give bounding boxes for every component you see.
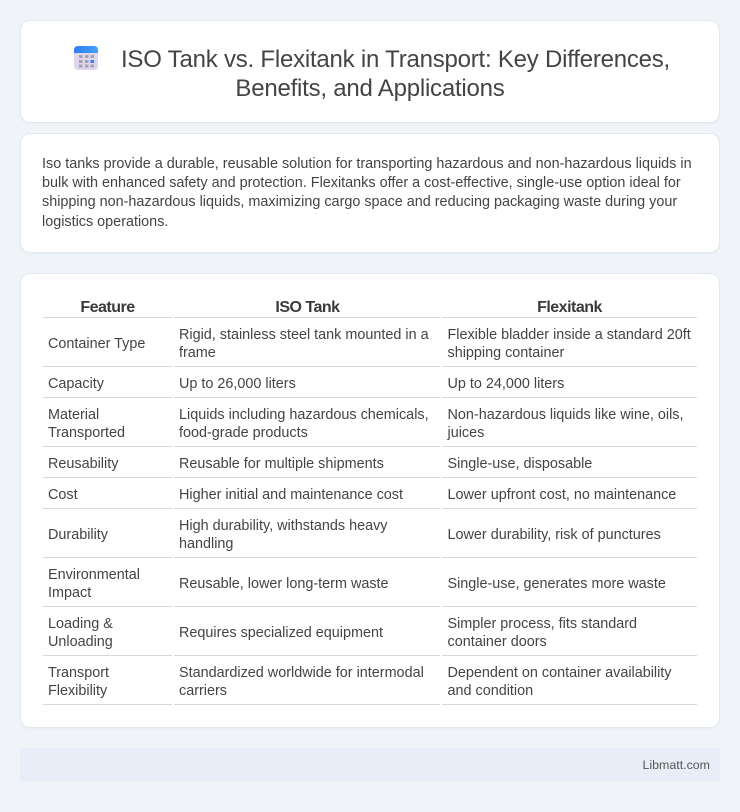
- comparison table: and condition: [448, 683, 533, 699]
- comparison table: Lower upfront cost, no maintenance: [448, 487, 676, 503]
- comparison table: shipping container: [448, 345, 564, 361]
- icon: calendar: [74, 46, 98, 70]
- row: Durability: Durability: [48, 527, 108, 543]
- row: Transport Flexibility: Flexibility: [48, 683, 107, 699]
- row: Reusability: Reusability: [48, 456, 118, 472]
- title: ISO Tank vs. Flexitank in Transport: Key Differences,: [121, 46, 670, 73]
- row: Material Transported: Transported: [48, 425, 125, 441]
- comparison table: frame: [179, 345, 216, 361]
- row: Material Transported: Material: [48, 407, 99, 423]
- comparison table: Single-use, generates more waste: [448, 576, 666, 592]
- comparison table: Rigid, stainless steel tank mounted in a: [179, 327, 429, 343]
- comparison table: Higher initial and maintenance cost: [179, 487, 403, 503]
- intro paragraph: Iso tanks provide a durable, reusable solution for transporting hazardous and non-hazardous liquids in: [42, 156, 692, 172]
- comparison table: Reusable, lower long-term waste: [179, 576, 389, 592]
- comparison table: Liquids including hazardous chemicals,: [179, 407, 429, 423]
- comparison table: container doors: [448, 634, 547, 650]
- intro paragraph: logistics operations.: [42, 214, 168, 230]
- intro text panel: [20, 133, 720, 253]
- footer bar: [20, 748, 720, 782]
- comparison table: Up to 24,000 liters: [448, 376, 564, 392]
- comparison table: Non-hazardous liquids like wine, oils,: [448, 407, 683, 423]
- title: Benefits, and Applications: [235, 75, 505, 102]
- row: Loading & Unloading: [48, 616, 113, 650]
- comparison table: carriers: [179, 683, 227, 699]
- column header: Flexitank: Flexitank: [537, 299, 602, 316]
- row: Environmental Impact: [48, 567, 140, 601]
- comparison table: Dependent on container availability: [448, 665, 672, 681]
- title: [121, 46, 670, 102]
- comparison table panel: [20, 273, 720, 728]
- column header: ISO Tank: ISO Tank: [275, 299, 340, 316]
- row: Material Transported: [48, 407, 125, 441]
- comparison table: Lower durability, risk of punctures: [448, 527, 661, 543]
- row: Cost: Cost: [48, 487, 78, 503]
- row: Capacity: Capacity: [48, 376, 104, 392]
- comparison table: food-grade products: [179, 425, 308, 441]
- intro paragraph: [42, 156, 692, 230]
- footer credit: Libmatt.com: [643, 758, 710, 772]
- row: Loading & Unloading: Loading &: [48, 616, 113, 632]
- comparison table: High durability, withstands heavy: [179, 518, 388, 534]
- row: Environmental Impact: Environmental: [48, 567, 140, 583]
- comparison table: handling: [179, 536, 233, 552]
- column header: Feature: Feature: [80, 299, 135, 316]
- row: Container Type: Container Type: [48, 336, 145, 352]
- intro paragraph: bulk with enhanced safety and protection. Flexitanks offer a cost-effective, single-use option ideal for: [42, 175, 681, 191]
- row: Transport Flexibility: [48, 665, 109, 699]
- comparison table: Requires specialized equipment: [179, 625, 383, 641]
- comparison table: Flexible bladder inside a standard 20ft: [448, 327, 691, 343]
- row: Environmental Impact: Impact: [48, 585, 91, 601]
- comparison table: Standardized worldwide for intermodal: [179, 665, 424, 681]
- header panel: [20, 20, 720, 123]
- intro paragraph: shipping non-hazardous liquids, maximizing cargo space and reducing packaging waste during your: [42, 194, 677, 210]
- comparison table: Simpler process, fits standard: [448, 616, 637, 632]
- comparison table: juices: [448, 425, 484, 441]
- row: Loading & Unloading: Unloading: [48, 634, 113, 650]
- row: Transport Flexibility: Transport: [48, 665, 109, 681]
- comparison table: Single-use, disposable: [448, 456, 592, 472]
- comparison table: Reusable for multiple shipments: [179, 456, 384, 472]
- comparison table: Up to 26,000 liters: [179, 376, 296, 392]
